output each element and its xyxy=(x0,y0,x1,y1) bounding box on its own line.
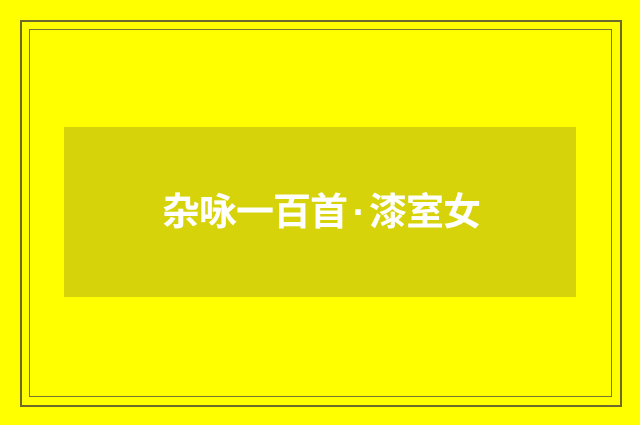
title panel xyxy=(64,127,576,297)
title: 杂咏一百首 漆室女 xyxy=(162,192,480,234)
title: · xyxy=(353,192,365,234)
inner border frame xyxy=(29,29,612,397)
